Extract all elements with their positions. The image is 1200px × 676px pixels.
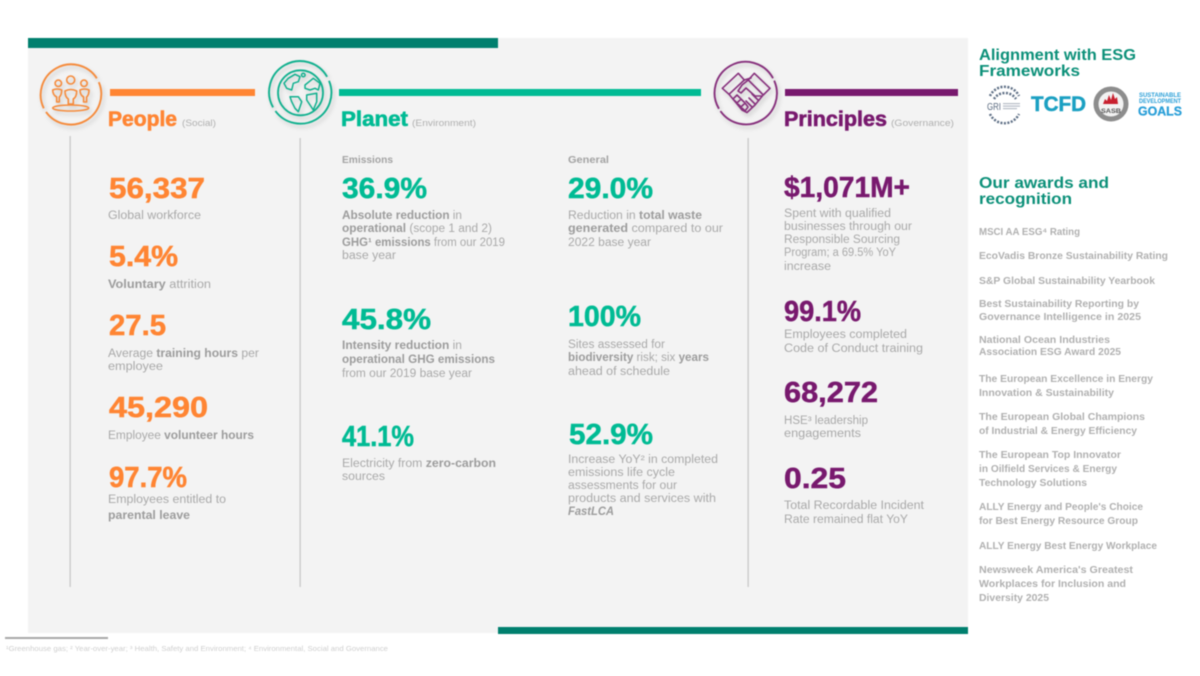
award list: Association ESG Award 2025 — [979, 347, 1121, 358]
stat: zero-carbon electricity: Electricity from zero-carbon — [342, 458, 496, 470]
stat: volunteer hours: 45,290 — [109, 392, 208, 424]
stat: biodiversity: biodiversity risk; six years — [568, 352, 709, 364]
stat: volunteer hours — [108, 392, 254, 442]
stat: absolute reduction: base year — [342, 250, 396, 262]
stat: parental leave — [108, 462, 226, 522]
heading: planet: Planet — [341, 108, 408, 131]
logo: SDG: GOALS — [1138, 104, 1182, 118]
logo: GRI: GRI — [987, 101, 1001, 113]
award list: for Best Energy Resource Group — [979, 516, 1138, 527]
award list: National Ocean Industries — [979, 335, 1110, 346]
planet rule — [339, 89, 701, 96]
icon: people group — [41, 64, 101, 125]
award list: Diversity 2025 — [979, 593, 1049, 604]
heading: awards: recognition — [979, 191, 1072, 208]
footnote rule — [5, 637, 108, 639]
top accent bar — [28, 38, 498, 48]
heading: principles: Principles — [784, 108, 887, 131]
award list — [979, 227, 1168, 604]
stat: global workforce: Global workforce — [108, 210, 201, 222]
heading: awards: Our awards and — [979, 175, 1109, 192]
people rule — [110, 89, 255, 96]
stat: incident rate: Total Recordable Incident — [784, 500, 925, 512]
stat: waste reduction: 29.0% — [568, 173, 653, 205]
stat: zero-carbon electricity — [342, 421, 496, 483]
logo: SASB — [1096, 89, 1126, 119]
stat: intensity reduction: Intensity reduction in — [342, 340, 462, 352]
column heading: emissions: Emissions — [342, 154, 393, 166]
stat: life cycle assessments: products and services with — [568, 493, 716, 505]
heading: awards — [979, 175, 1109, 208]
icon: globe — [269, 61, 331, 124]
award list: S&P Global Sustainability Yearbook — [979, 276, 1155, 287]
award list: Innovation & Sustainability — [979, 388, 1114, 399]
award list: Technology Solutions — [979, 478, 1087, 489]
stat: voluntary attrition: 5.4% — [109, 241, 178, 273]
stat: responsible sourcing spend: Responsible Sourcing — [784, 234, 900, 246]
panel: awards — [979, 175, 1168, 604]
award list: ALLY Energy Best Energy Workplace — [979, 541, 1157, 552]
stat: volunteer hours: Employee volunteer hours — [108, 430, 254, 442]
stat: voluntary attrition: Voluntary attrition — [108, 279, 211, 291]
planet divider — [300, 138, 301, 587]
stat: code of conduct: Employees completed — [784, 329, 907, 341]
award list: EcoVadis Bronze Sustainability Rating — [979, 251, 1168, 262]
bottom accent bar — [498, 627, 968, 634]
stat: responsible sourcing spend: Program; a 69.5% YoY — [784, 247, 896, 259]
icon: handshake — [715, 62, 777, 124]
heading: frameworks: Alignment with ESG — [979, 47, 1136, 64]
heading: people: People — [108, 108, 177, 131]
stat: parental leave: Employees entitled to — [108, 494, 226, 506]
stat: responsible sourcing spend: increase — [784, 261, 831, 273]
stat: global workforce — [108, 173, 205, 222]
logo: SDG: DEVELOPMENT — [1139, 99, 1181, 105]
award list: Newsweek America's Greatest — [979, 565, 1134, 576]
stat: biodiversity: 100% — [568, 301, 641, 333]
stat: life cycle assessments: assessments for our — [568, 480, 677, 492]
stat: life cycle assessments: emissions life cycle — [568, 467, 675, 479]
people divider — [70, 136, 71, 587]
stat: hse engagements: HSE³ leadership — [784, 415, 868, 427]
column heading: general: General — [568, 154, 609, 166]
stat: biodiversity: Sites assessed for — [568, 339, 665, 351]
award list: in Oilfield Services & Energy — [979, 464, 1117, 475]
sublabel: environment: (Environment) — [412, 118, 476, 128]
panel: planet — [269, 61, 723, 587]
stat: absolute reduction: operational (scope 1 and 2) — [342, 223, 492, 235]
stat: training hours: employee — [108, 361, 163, 373]
award list: of Industrial & Energy Efficiency — [979, 426, 1137, 437]
stat: biodiversity: ahead of schedule — [568, 366, 670, 378]
logo: TCFD: TCFD — [1031, 93, 1086, 116]
sublabel: social: (Social) — [182, 118, 216, 128]
stat: code of conduct: Code of Conduct training — [784, 343, 923, 355]
stat: biodiversity — [568, 301, 709, 378]
stat: intensity reduction: 45.8% — [342, 304, 431, 336]
stat: hse engagements — [784, 377, 878, 440]
stat: code of conduct: 99.1% — [784, 296, 861, 328]
stat: intensity reduction — [342, 304, 495, 380]
heading: frameworks: Frameworks — [979, 63, 1080, 80]
panel: frameworks — [979, 47, 1182, 123]
stat: absolute reduction: GHG¹ emissions from our 2019 — [342, 237, 505, 249]
stat: waste reduction: 2022 base year — [568, 237, 651, 249]
sublabel: governance: (Governance) — [891, 118, 954, 128]
stat: global workforce: 56,337 — [109, 173, 205, 205]
award list: Workplaces for Inclusion and — [979, 579, 1126, 590]
panel: people — [41, 64, 259, 587]
stat: training hours — [108, 310, 259, 373]
stat: code of conduct — [784, 296, 923, 355]
heading: frameworks — [979, 47, 1136, 80]
stat: voluntary attrition — [108, 241, 211, 291]
stat: absolute reduction: 36.9% — [342, 173, 427, 205]
stat: incident rate: Rate remained flat YoY — [784, 514, 908, 526]
stat: hse engagements: engagements — [784, 428, 861, 440]
award list: The European Excellence in Energy — [979, 374, 1153, 385]
stat: incident rate: 0.25 — [784, 463, 846, 495]
stat: life cycle assessments — [568, 419, 718, 518]
award list: The European Top Innovator — [979, 450, 1121, 461]
principles divider — [748, 138, 749, 587]
award list: Governance Intelligence in 2025 — [979, 312, 1141, 323]
stat: intensity reduction: operational GHG emissions — [342, 354, 495, 366]
logo: SASB: SASB — [1101, 109, 1122, 115]
stat: waste reduction — [568, 173, 723, 249]
stat: intensity reduction: from our 2019 base year — [342, 368, 472, 380]
stat: zero-carbon electricity: 41.1% — [342, 421, 414, 453]
stat: responsible sourcing spend: $1,071M+ — [784, 172, 910, 204]
stat: life cycle assessments: 52.9% — [569, 419, 653, 451]
stat: zero-carbon electricity: sources — [342, 471, 385, 483]
stat: parental leave: 97.7% — [109, 462, 187, 494]
stat: absolute reduction — [342, 173, 505, 262]
stat: parental leave: parental leave — [108, 510, 190, 522]
stat: responsible sourcing spend: Spent with qualified — [784, 208, 891, 220]
stat: waste reduction: Reduction in total waste — [568, 210, 702, 222]
logo: GRI — [987, 87, 1020, 123]
panel: background — [28, 38, 968, 633]
stat: waste reduction: generated compared to our — [568, 223, 723, 235]
award list: ALLY Energy and People's Choice — [979, 502, 1143, 513]
stat: life cycle assessments: FastLCA — [568, 506, 614, 518]
stat: hse engagements: 68,272 — [784, 377, 878, 409]
footnote: ¹Greenhouse gas; ² Year-over-year; ³ Health, Safety and Environment; ⁴ Environmental, Social and Governance — [6, 644, 388, 653]
panel: principles — [715, 62, 958, 587]
stat: incident rate — [784, 463, 925, 526]
award list: Best Sustainability Reporting by — [979, 299, 1139, 310]
stat: training hours: 27.5 — [109, 310, 166, 342]
logo: SDG: SUSTAINABLE — [1139, 93, 1181, 99]
stat: training hours: Average training hours per — [108, 348, 259, 360]
award list: MSCI AA ESG⁴ Rating — [979, 227, 1080, 238]
stat: life cycle assessments: Increase YoY² in completed — [568, 454, 718, 466]
logo: SDG — [1138, 93, 1182, 118]
award list: The European Global Champions — [979, 412, 1145, 423]
stat: responsible sourcing spend: businesses through our — [784, 221, 912, 233]
stat: responsible sourcing spend — [784, 172, 912, 273]
principles rule — [785, 89, 958, 96]
stat: absolute reduction: Absolute reduction in — [342, 210, 462, 222]
